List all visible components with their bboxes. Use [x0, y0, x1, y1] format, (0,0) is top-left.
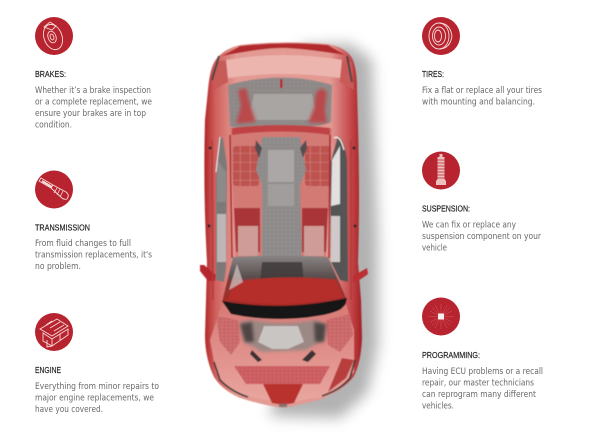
text: suspension description: We can fix or replace any — [422, 220, 516, 230]
rear suspension red right — [308, 88, 327, 123]
icon: tire — [422, 17, 460, 55]
right fender shade — [328, 358, 354, 392]
hood — [210, 304, 354, 403]
text: programming description: can reprogram many different — [422, 389, 536, 400]
text: engine description: have you covered. — [35, 404, 103, 415]
text: brakes description — [35, 85, 152, 130]
text: engine description: major engine replacements, we — [35, 392, 154, 404]
right side window — [330, 136, 348, 282]
hood right radiator grid — [326, 314, 353, 352]
text: transmission description — [35, 238, 152, 272]
left rear seat — [234, 208, 260, 252]
icon: suspension strut — [422, 152, 460, 190]
left side window — [216, 137, 227, 282]
rear window grey — [228, 78, 332, 128]
engine block — [240, 320, 326, 352]
car shadow — [270, 44, 378, 418]
car body — [204, 42, 362, 408]
black cowl band — [222, 298, 347, 321]
text: transmission description: From fluid changes to full — [35, 238, 131, 249]
left front seat — [233, 146, 259, 186]
rear deck side texture — [214, 60, 354, 90]
text: suspension description — [422, 220, 541, 254]
text: programming description — [422, 366, 543, 412]
car illustration — [200, 42, 378, 418]
text: suspension description: vehicle — [422, 242, 447, 254]
icon: chip — [422, 298, 460, 336]
front bumper grid — [234, 366, 330, 384]
icon: transmission part — [35, 170, 73, 208]
text: brakes description: ensure your brakes are in top — [35, 108, 146, 119]
heading: brakes: BRAKES: — [35, 69, 66, 79]
rear deck — [226, 55, 342, 78]
center tunnel — [256, 137, 306, 262]
front edges — [214, 362, 248, 397]
brakes block — [35, 17, 152, 130]
suspension block — [422, 152, 541, 254]
transmission block — [35, 170, 152, 272]
text: programming description: Having ECU problems or a recall — [422, 366, 543, 377]
heading: transmission: TRANSMISSION — [35, 222, 90, 232]
tires block — [422, 17, 542, 108]
windshield — [222, 256, 347, 309]
heading: tires: TIRES: — [422, 69, 444, 79]
icon: brake disc — [35, 17, 73, 55]
text: programming description: repair, our master technicians — [422, 378, 534, 388]
programming block — [422, 298, 543, 412]
cabin floor — [230, 128, 332, 258]
text: engine description — [35, 381, 159, 415]
text: tires description: with mounting and balancing. — [422, 96, 535, 108]
front center wedge — [263, 384, 303, 405]
text: suspension description: suspension component on your — [422, 231, 541, 242]
text: brakes description: Whether it’s a brake inspection — [35, 85, 151, 96]
text: tires description — [422, 85, 542, 108]
text: engine description: Everything from minor repairs to — [35, 381, 159, 392]
text: transmission description: transmission replacements, it's — [35, 250, 152, 260]
left mirror — [200, 265, 216, 281]
rear suspension red left — [236, 88, 256, 124]
heading: programming: PROGRAMMING: — [422, 350, 480, 360]
rear bumper highlight — [222, 43, 345, 56]
text: tires description: Fix a flat or replace all your tires — [422, 85, 542, 96]
icon: engine — [35, 313, 73, 351]
text: brakes description: or a complete replacement, we — [35, 96, 152, 108]
right mirror — [353, 268, 368, 282]
engine block — [35, 313, 159, 415]
heading: suspension: SUSPENSION: — [422, 204, 470, 214]
right front seat — [305, 146, 331, 186]
text: transmission description: no problem. — [35, 261, 81, 272]
heading: engine: ENGINE — [35, 365, 61, 375]
hood left radiator grid — [216, 316, 240, 355]
text: programming description: vehicles. — [422, 400, 454, 412]
text: brakes description: condition. — [35, 120, 72, 130]
right rear seat — [302, 208, 328, 252]
door pillars — [230, 135, 330, 258]
